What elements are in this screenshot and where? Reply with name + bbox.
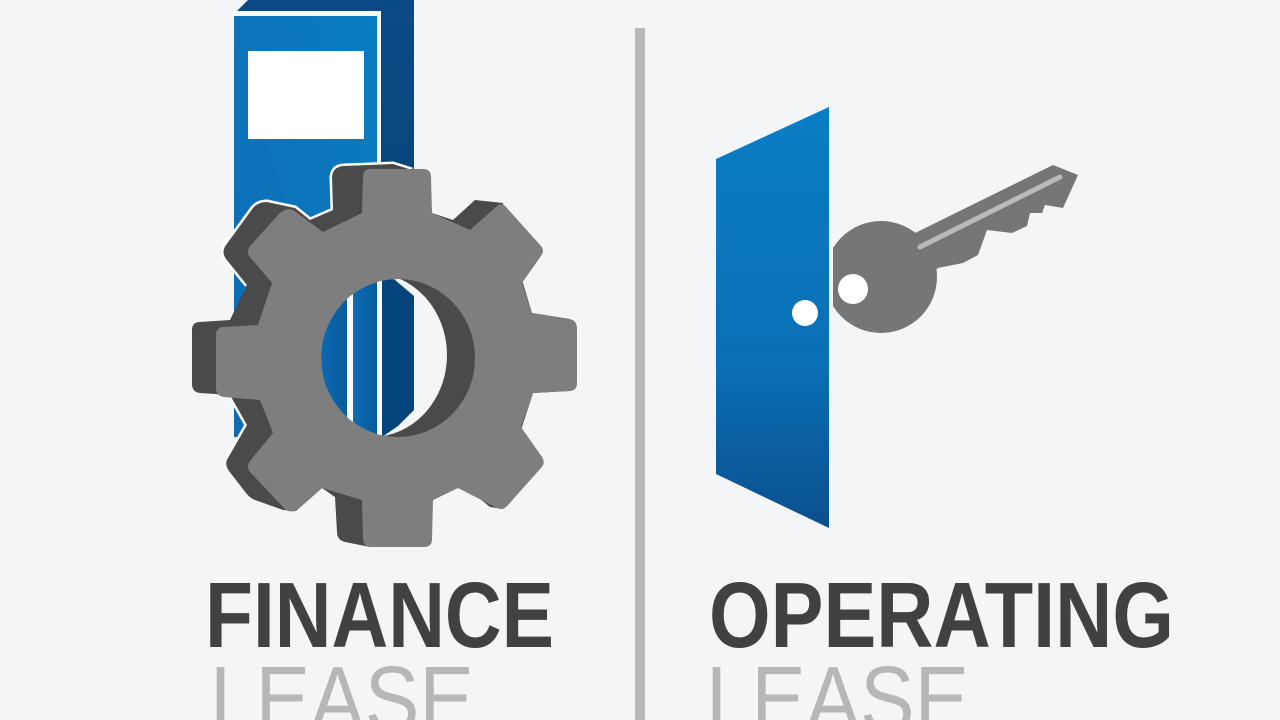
heading: finance lease: [205, 563, 554, 720]
book label: [248, 51, 364, 139]
icon: binder book: [234, 0, 414, 437]
icon: key: [825, 165, 1078, 333]
center divider: [635, 28, 645, 720]
icon: door: [716, 107, 829, 528]
door knob: [792, 300, 818, 326]
heading: operating lease: OPERATING: [709, 563, 1174, 667]
gear hole: [321, 279, 475, 437]
icon: gear: [192, 164, 577, 547]
heading: operating lease: [706, 563, 1174, 720]
gear back: [192, 164, 570, 547]
gear face: [216, 169, 577, 547]
heading: finance lease: FINANCE: [205, 563, 554, 667]
gear outline: [224, 164, 412, 458]
